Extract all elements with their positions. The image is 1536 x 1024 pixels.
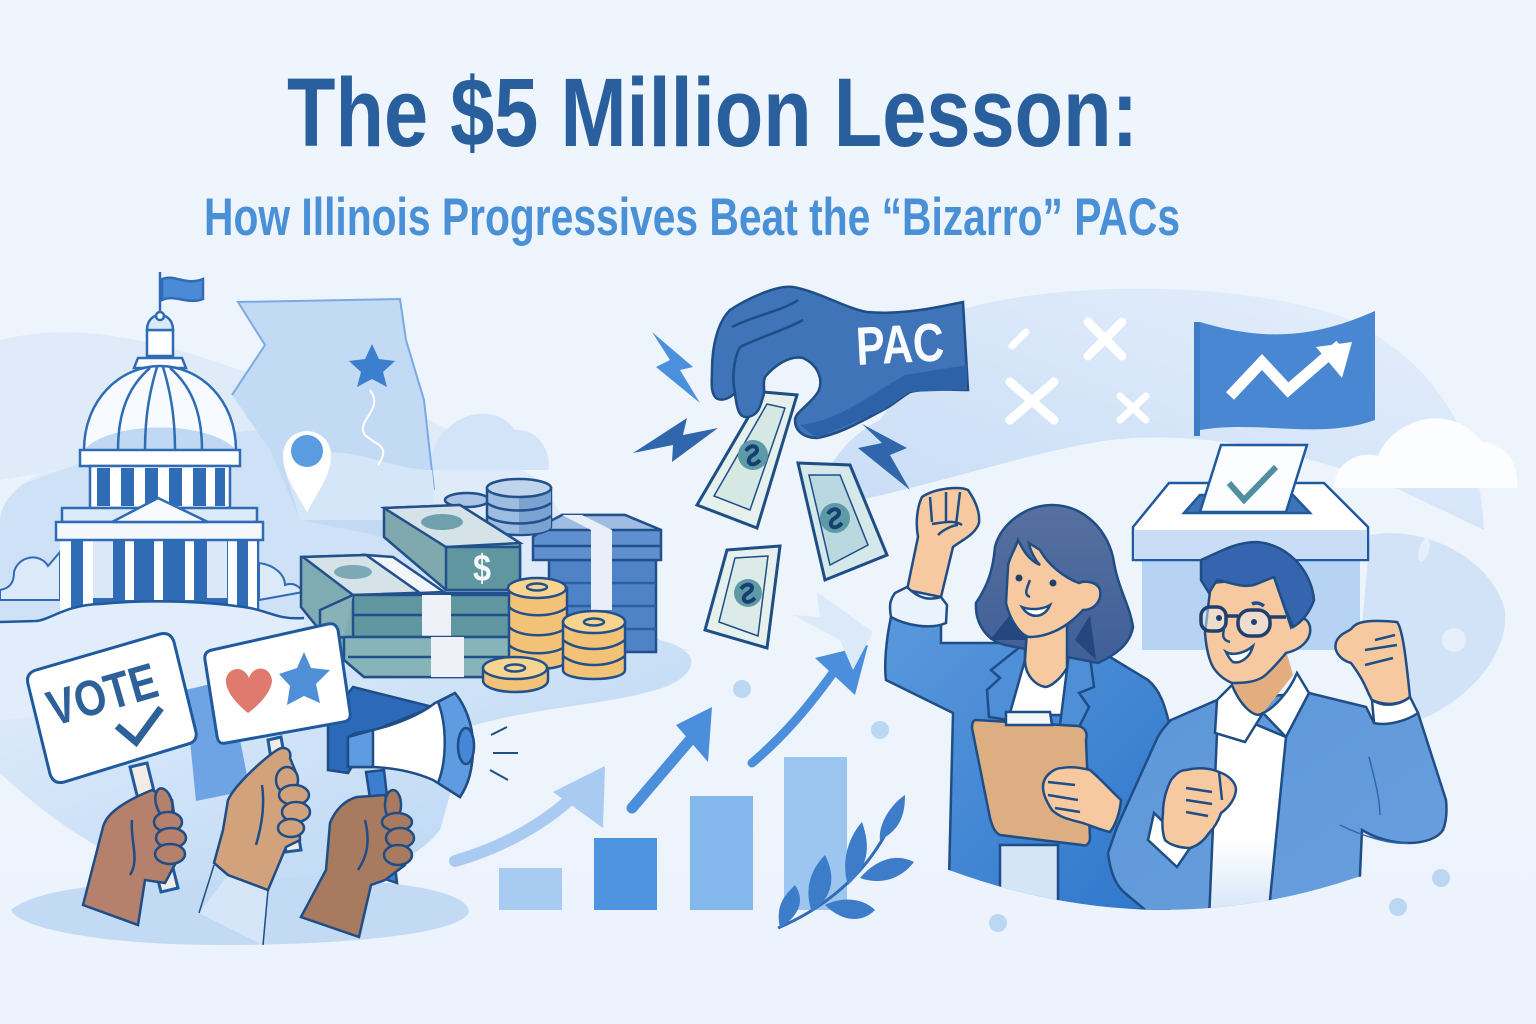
PAC gloved hand xyxy=(712,287,968,438)
icon: location pin xyxy=(283,431,331,512)
icon: olive branch xyxy=(778,795,914,928)
hair xyxy=(976,505,1133,663)
woman campaigner xyxy=(885,488,1170,910)
lightning bolts xyxy=(633,332,910,490)
growth bars xyxy=(499,757,847,910)
dollar label: $ xyxy=(473,548,491,590)
raised arm xyxy=(907,488,979,597)
collar xyxy=(1215,685,1263,742)
body xyxy=(885,617,1170,910)
blue stack xyxy=(533,515,661,652)
square behind signs xyxy=(185,680,250,801)
bill xyxy=(697,392,797,528)
sound lines xyxy=(490,727,518,780)
megaphone xyxy=(328,687,518,883)
upper cash stack xyxy=(384,505,520,590)
heart and star sign xyxy=(205,624,350,852)
lower cash stack xyxy=(301,555,533,677)
neck xyxy=(1233,654,1293,714)
title: The $5 Million Lesson: xyxy=(287,58,1138,167)
decorative dots xyxy=(733,680,1450,932)
vote sign xyxy=(27,633,196,892)
x marks xyxy=(1010,322,1146,420)
raised fist xyxy=(1335,621,1418,724)
icon: heart xyxy=(226,668,272,713)
icon: star xyxy=(279,652,330,705)
background shapes xyxy=(0,289,1517,945)
foreground hill xyxy=(0,601,304,720)
icon: star xyxy=(349,344,395,387)
bill xyxy=(705,546,780,648)
hair xyxy=(1201,542,1314,627)
victory flag xyxy=(1194,311,1375,436)
hand: right xyxy=(301,790,414,937)
hand: middle xyxy=(199,748,310,945)
body xyxy=(1108,693,1447,920)
falling bills xyxy=(697,392,887,648)
hand on clipboard xyxy=(1043,767,1121,832)
capitol building xyxy=(56,272,263,614)
hand: left xyxy=(83,786,186,925)
gold coins xyxy=(483,578,625,692)
glasses xyxy=(1201,607,1286,636)
ballot xyxy=(1200,445,1307,512)
money stacks xyxy=(301,479,661,692)
bill xyxy=(798,463,887,580)
silver coins xyxy=(445,479,551,535)
neck and face xyxy=(1025,625,1067,687)
clouds near capitol xyxy=(0,552,303,600)
lower fist xyxy=(1148,768,1236,867)
man campaigner xyxy=(1108,542,1447,920)
illinois map xyxy=(232,299,434,540)
ballot box xyxy=(1133,445,1368,650)
clipboard xyxy=(972,712,1090,846)
face xyxy=(1205,577,1310,683)
icon: flag xyxy=(162,278,203,301)
protest signs and hands xyxy=(27,624,414,945)
label: PAC xyxy=(854,312,946,377)
arrows rising xyxy=(455,592,873,861)
vote sign: VOTE xyxy=(41,652,164,737)
subtitle: How Illinois Progressives Beat the “Bizarro” PACs xyxy=(204,188,1180,247)
